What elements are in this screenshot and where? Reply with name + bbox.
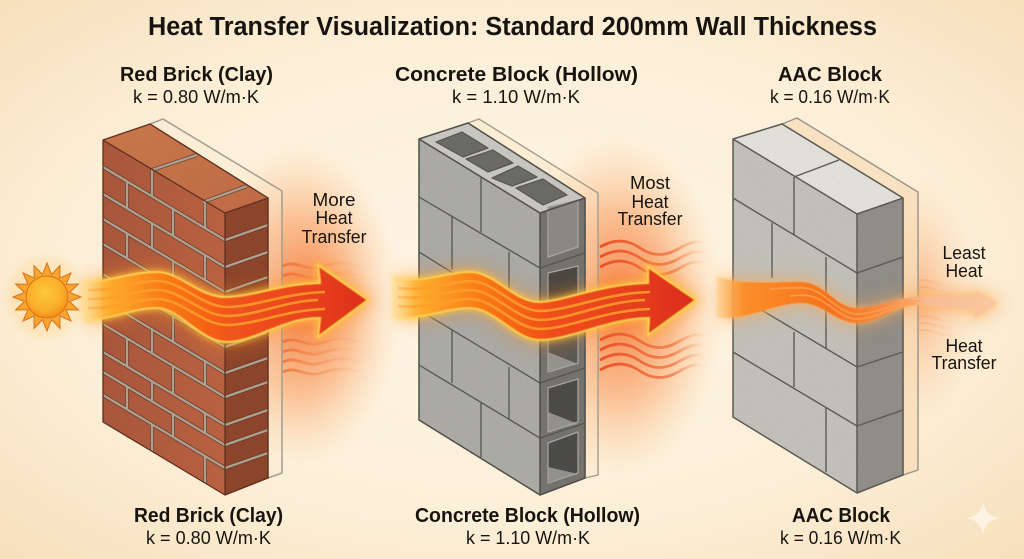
concrete top face xyxy=(419,123,585,213)
AAC texture xyxy=(733,124,903,493)
AAC left face xyxy=(733,139,857,493)
heat arrow: concrete xyxy=(393,267,696,340)
brick outline xyxy=(103,124,268,495)
heat glow: behind brick wall xyxy=(200,145,400,465)
label: most heat transfer: Transfer xyxy=(618,208,682,229)
heat glow: behind AAC wall xyxy=(856,175,980,425)
concrete outline xyxy=(419,123,585,495)
label: heat transfer xyxy=(932,335,996,373)
heat arrow: AAC xyxy=(717,277,997,323)
title: Heat Transfer Visualization: Standard 200mm Wall Thickness xyxy=(148,13,877,41)
concrete inner shading xyxy=(548,352,578,482)
label: most heat transfer xyxy=(618,172,682,229)
heading: red brick top xyxy=(120,63,273,107)
concrete joints xyxy=(419,178,585,457)
AAC right face xyxy=(857,198,903,493)
caption: red brick bottom: Red Brick (Clay) xyxy=(134,504,283,527)
heading: concrete block top xyxy=(395,63,638,107)
wavy heat lines: brick xyxy=(283,263,363,374)
heading: AAC block top xyxy=(770,63,890,107)
AAC top face xyxy=(733,124,903,214)
label: least heat: Least xyxy=(942,242,986,263)
caption: concrete block bottom xyxy=(415,504,640,548)
caption: concrete block bottom: k = 1.10 W/m·K xyxy=(466,528,590,548)
label: heat transfer: Heat xyxy=(946,335,982,356)
caption: AAC block bottom: k = 0.16 W/m·K xyxy=(780,528,901,548)
icon: sparkle xyxy=(966,501,1000,535)
concrete left face xyxy=(419,139,540,495)
concrete openings in end face xyxy=(548,200,578,483)
heat glow: behind concrete wall xyxy=(513,135,723,475)
label: more heat transfer: Transfer xyxy=(302,226,366,247)
concrete right face xyxy=(540,198,585,495)
wall: hollow concrete block xyxy=(419,119,598,495)
label: more heat transfer: Heat xyxy=(316,207,352,228)
caption: AAC block bottom xyxy=(780,504,901,548)
wall: red brick xyxy=(103,119,282,495)
brick top face xyxy=(103,124,268,213)
label: least heat: Heat xyxy=(946,260,982,281)
heading: red brick top: Red Brick (Clay) xyxy=(120,63,273,86)
brick mortar lines xyxy=(103,155,268,483)
wavy heat lines: AAC xyxy=(918,280,956,335)
label: most heat transfer: Heat xyxy=(632,191,668,212)
wall: AAC block xyxy=(733,118,918,493)
glass envelope: AAC back xyxy=(782,118,918,475)
label: most heat transfer: Most xyxy=(630,172,670,193)
brick texture xyxy=(103,124,268,495)
caption: red brick bottom: k = 0.80 W/m·K xyxy=(146,528,271,548)
wavy heat lines: concrete xyxy=(600,241,704,378)
heading: red brick top: k = 0.80 W/m·K xyxy=(133,87,259,107)
concrete openings in top xyxy=(436,132,567,205)
label: heat transfer: Transfer xyxy=(932,352,996,373)
concrete texture xyxy=(419,123,585,495)
heat arrow: brick xyxy=(83,265,368,342)
heading: AAC block top: k = 0.16 W/m·K xyxy=(770,87,890,107)
brick right face xyxy=(225,198,268,495)
brick left face xyxy=(103,140,225,495)
label: more heat transfer: More xyxy=(312,189,356,210)
label: more heat transfer xyxy=(302,189,366,247)
heading: concrete block top: Concrete Block (Hollow) xyxy=(395,63,638,86)
AAC outline xyxy=(733,124,903,493)
heading: AAC block top: AAC Block xyxy=(778,63,883,86)
caption: concrete block bottom: Concrete Block (Hollow) xyxy=(415,504,640,527)
sun icon xyxy=(7,257,87,337)
glass envelope: brick back xyxy=(150,119,282,478)
heading: concrete block top: k = 1.10 W/m·K xyxy=(452,87,580,107)
label: least heat xyxy=(942,242,986,281)
glass envelope: concrete back xyxy=(468,119,598,478)
caption: AAC block bottom: AAC Block xyxy=(792,504,891,527)
AAC joints xyxy=(733,160,903,472)
caption: red brick bottom xyxy=(134,504,283,548)
